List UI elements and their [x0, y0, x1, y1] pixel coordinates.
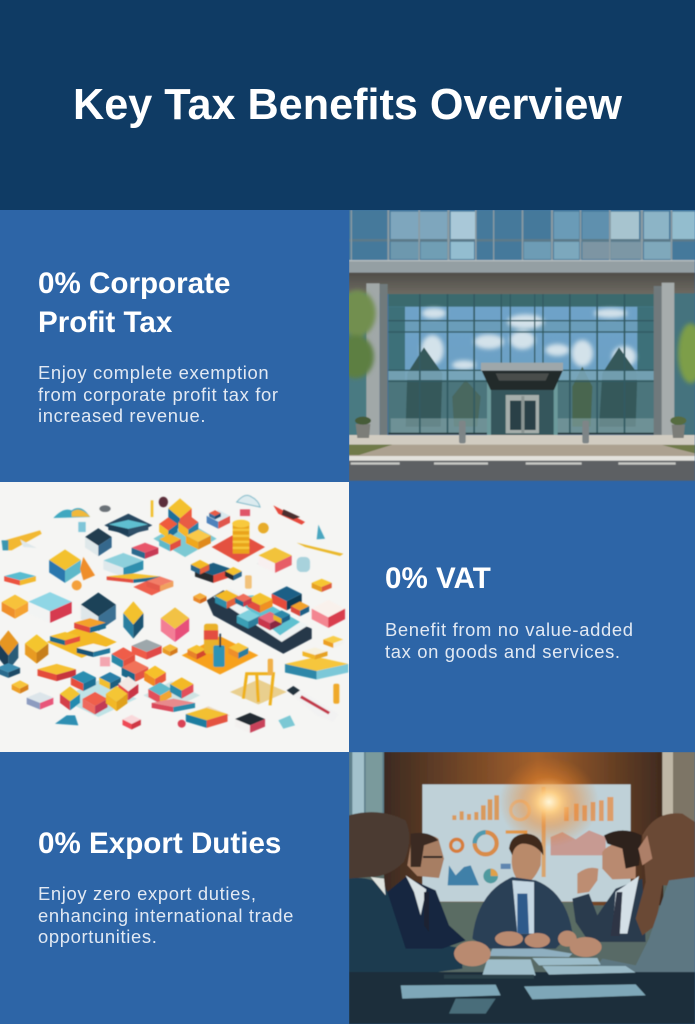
entrance canopy and doors	[481, 363, 563, 435]
panel: VAT	[349, 482, 695, 752]
text: export duties description: enhancing international trade	[38, 905, 294, 926]
heading: corporate profit tax	[38, 267, 230, 338]
coin tower	[232, 520, 250, 554]
text: corporate profit tax description: increased revenue.	[38, 405, 206, 426]
heading: corporate profit tax: 0% Corporate	[38, 267, 230, 300]
woman at left	[349, 812, 462, 999]
room background	[349, 752, 695, 1024]
heading: corporate profit tax: Profit Tax	[38, 306, 172, 338]
text: VAT description	[385, 619, 634, 662]
bollards and planters	[355, 416, 686, 443]
train	[287, 686, 338, 722]
image: business team meeting	[349, 752, 695, 1024]
building blocks	[0, 498, 348, 733]
sun glare	[499, 757, 599, 847]
header band	[0, 0, 695, 210]
text: export duties description: opportunities.	[38, 926, 158, 947]
platforms	[47, 514, 293, 724]
tanks and crane	[204, 557, 339, 705]
trees at edges	[337, 290, 695, 383]
glass curtain wall	[388, 294, 654, 435]
upper glass facade	[349, 210, 695, 261]
heading: VAT: 0% VAT	[385, 562, 491, 595]
hands	[454, 931, 602, 966]
text: corporate profit tax description: from corporate profit tax for	[38, 384, 279, 405]
small cargo items	[72, 497, 295, 729]
panel: corporate profit tax	[0, 210, 349, 482]
panel: export duties	[0, 752, 349, 1024]
text: export duties description: Enjoy zero export duties,	[38, 883, 257, 904]
text: VAT description: tax on goods and services.	[385, 641, 621, 662]
text: corporate profit tax description: Enjoy complete exemption	[38, 362, 269, 383]
heading: export duties: 0% Export Duties	[38, 827, 281, 860]
image: isometric trade and logistics illustration	[0, 482, 349, 752]
title: Key Tax Benefits Overview	[73, 81, 622, 129]
text: VAT description: Benefit from no value-added	[385, 619, 634, 640]
man at centre	[472, 834, 572, 949]
table with papers	[349, 949, 695, 1024]
concrete slab and soffit	[349, 260, 695, 294]
pavement and road	[349, 435, 695, 481]
presentation board with charts	[422, 784, 631, 902]
text: corporate profit tax description	[38, 362, 279, 426]
planes, boats and clouds	[2, 495, 343, 725]
text: export duties description	[38, 883, 294, 947]
man with glasses	[387, 833, 466, 949]
woman at right	[597, 813, 695, 992]
concrete columns	[366, 283, 674, 436]
side glass	[349, 293, 369, 435]
image: glass office building	[349, 210, 695, 482]
man at right	[572, 830, 646, 942]
cargo ship	[207, 586, 312, 654]
